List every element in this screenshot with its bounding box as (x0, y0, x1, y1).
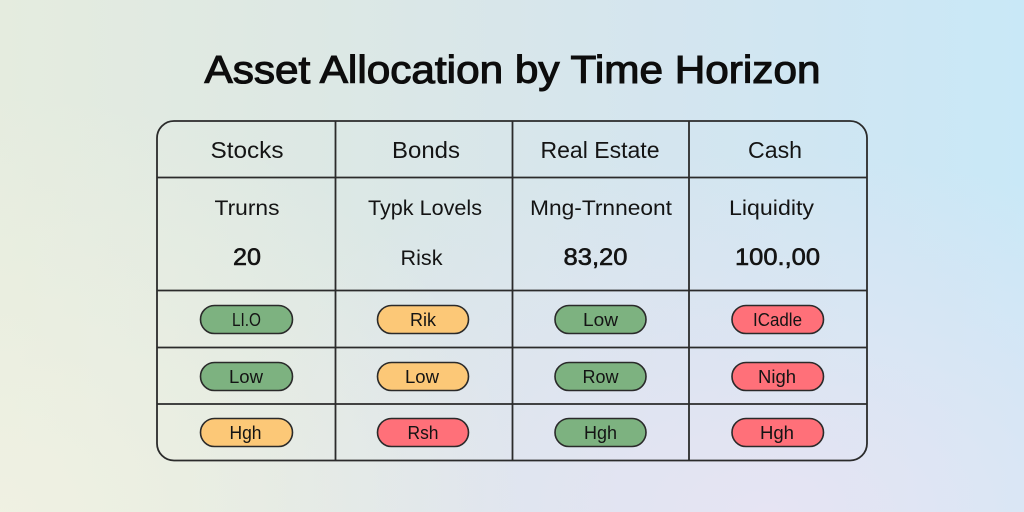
pill: Rsh (378, 418, 468, 446)
metric label row (214, 197, 815, 220)
table grid (157, 121, 867, 460)
metric value row: Risk (400, 247, 443, 270)
header row: Stocks (210, 137, 284, 163)
pill: LI.O (200, 306, 292, 334)
metric value row (233, 244, 820, 271)
pill: LI.O: LI.O (232, 310, 261, 330)
table (157, 121, 867, 460)
pill: Row (555, 362, 646, 390)
header row: Real Estate (540, 137, 660, 163)
pill: Hgh cash (732, 418, 824, 446)
header row (210, 137, 802, 163)
metric label row: Liquidity (729, 197, 815, 220)
metric label row: Trurns (214, 197, 280, 220)
pill: Row: Row (582, 367, 619, 387)
metric value row: 20 (233, 244, 261, 271)
metric value row: 100.,00 (735, 244, 820, 271)
pill: Low real estate (555, 306, 646, 334)
pill: Hgh stocks (200, 418, 292, 446)
pill: ICadle: ICadle (753, 310, 802, 330)
pill: Low stocks: Low (229, 367, 264, 387)
pill: Hgh stocks: Hgh (230, 423, 262, 443)
pill: Low stocks (200, 362, 292, 390)
header row: Cash (748, 137, 802, 163)
pill: Low bonds (378, 362, 468, 390)
pill: Rik (378, 306, 468, 334)
pill: Rik: Rik (410, 310, 437, 330)
pill: Nigh: Nigh (758, 367, 796, 387)
pill: Nigh (732, 362, 824, 390)
pill: Low bonds: Low (405, 367, 440, 387)
pill: Hgh real estate (555, 418, 646, 446)
header row: Bonds (392, 137, 460, 163)
metric value row: 83,20 (564, 244, 628, 271)
pill: ICadle (732, 306, 824, 334)
pill: Hgh real estate: Hgh (584, 423, 617, 443)
pill: Hgh cash: Hgh (760, 423, 794, 443)
title: Asset Allocation by Time Horizon (204, 49, 820, 92)
pill: Rsh: Rsh (408, 423, 438, 443)
pill: Low real estate: Low (583, 310, 619, 330)
metric label row: Typk Lovels (368, 197, 482, 220)
metric label row: Mng-Trnneont (530, 197, 672, 220)
